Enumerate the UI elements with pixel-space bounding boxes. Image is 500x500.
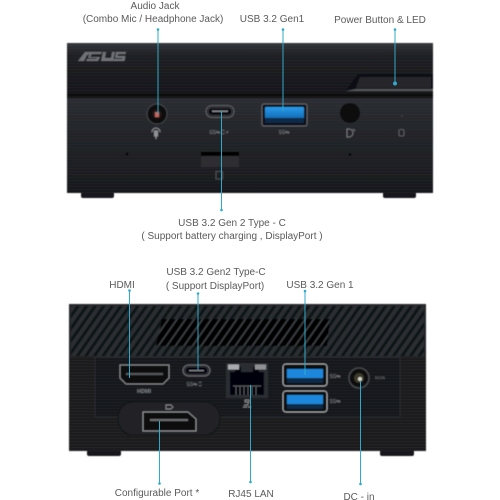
lower panel (69, 357, 426, 451)
DC-in marking: DCIN (375, 375, 385, 380)
callout: USB 3.2 Gen1 front: USB 3.2 Gen1 (240, 14, 305, 25)
SD card slot (201, 152, 239, 167)
callout: USB 3.2 Gen 1 rear (286, 280, 354, 375)
HDMI label on case: HDMI (137, 389, 151, 395)
callout: USB 3.2 Gen1 front (240, 14, 305, 111)
callout: power button: Power Button & LED (334, 15, 426, 26)
storage icon (399, 130, 404, 136)
audio jack icon (152, 128, 160, 139)
callout: HDMI: HDMI (109, 280, 135, 291)
lower body (67, 98, 433, 193)
callout: RJ45 LAN: RJ45 LAN (228, 489, 274, 500)
USB-C icons: SS⇆ ⎕ ≠ (209, 130, 229, 136)
USB-C port (206, 106, 234, 118)
bottom device: rear view (69, 304, 426, 456)
USB-A icon: SS⇆ (279, 130, 289, 136)
foot left (87, 450, 121, 456)
HDMI port (120, 365, 169, 384)
ventilated top (71, 306, 424, 356)
pinhole left (126, 153, 128, 155)
USB-A icon upper: SS⇆ (330, 374, 340, 380)
USB-C icon: SS⇆ ⎕ (186, 382, 202, 388)
port inset panel (95, 357, 400, 417)
callout: USB-C rear (166, 267, 266, 370)
brushed texture (67, 43, 433, 193)
power button (346, 74, 433, 91)
callout: USB-C front (141, 111, 323, 242)
vent slots (156, 319, 330, 346)
callout: USB-C front: ( Support battery charging , DisplayPort ) (141, 231, 323, 242)
callout: audio jack: (Combo Mic / Headphone Jack) (83, 14, 223, 25)
callout: DC-in (343, 381, 375, 500)
callout: USB-C rear: USB 3.2 Gen2 Type-C (166, 267, 266, 278)
callout: USB 3.2 Gen 1 rear: USB 3.2 Gen 1 (286, 280, 354, 291)
callout: USB-C front: USB 3.2 Gen 2 Type - C (178, 218, 286, 229)
DisplayPort connector (143, 412, 196, 431)
foot right (383, 192, 416, 198)
USB-A icon lower: SS⇆ (330, 399, 340, 405)
callout: power button (334, 15, 426, 86)
callout: USB-C rear: ( Support DisplayPort) (166, 281, 264, 292)
USB-A port lower (283, 391, 327, 412)
brushed texture (69, 357, 426, 451)
front groove (67, 93, 433, 98)
USB-A port (262, 104, 307, 126)
DisplayPort icon (166, 405, 173, 409)
top device: front view (67, 43, 433, 198)
callout: configurable port: Configurable Port * (115, 488, 199, 499)
callout: audio jack: Audio Jack (131, 1, 180, 12)
callout: RJ45 LAN (228, 385, 274, 500)
audio jack (147, 104, 167, 124)
RJ45 LAN port (226, 363, 268, 398)
SD card icon (216, 172, 222, 179)
USB-A port upper (283, 364, 327, 386)
callout: HDMI (109, 280, 135, 378)
brushed texture inset (95, 357, 400, 417)
upper body (67, 43, 433, 94)
DisplayPort plate (118, 402, 220, 435)
rear body (69, 304, 426, 451)
foot right (380, 450, 414, 456)
LED pinhole (401, 115, 403, 117)
side icon (347, 129, 355, 137)
LAN icon (243, 400, 251, 407)
DC-in jack (349, 368, 369, 388)
foot left (81, 192, 114, 198)
USB-C port (183, 365, 210, 376)
callout: audio jack (83, 1, 223, 114)
pinhole right (349, 153, 351, 156)
power-in round cover (340, 103, 360, 123)
callout: configurable port (115, 421, 199, 499)
ASUS logo (78, 52, 126, 61)
